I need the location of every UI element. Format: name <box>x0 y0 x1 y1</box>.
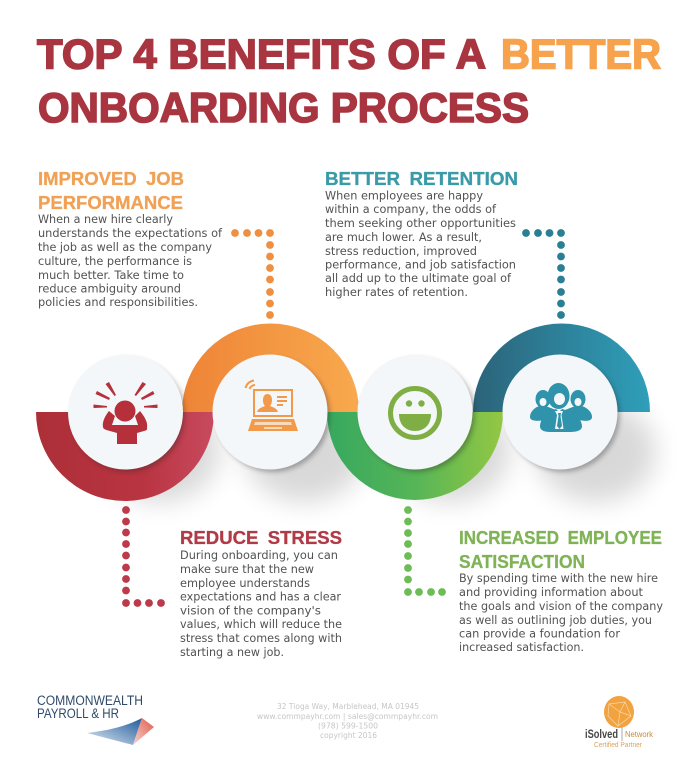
icon: business team <box>530 383 592 432</box>
logo: iSolved Network certified partner: iSolved <box>585 729 618 741</box>
dotted connector <box>231 229 274 319</box>
body text: the goals and vision of the company <box>459 599 663 613</box>
body text: By spending time with the new hire <box>459 571 658 585</box>
body text: stress that comes along with <box>180 631 342 645</box>
body text: values, which will reduce the <box>180 617 342 631</box>
segment: orange half ring <box>182 324 359 412</box>
body text: much better. Take time to <box>38 268 184 282</box>
body text <box>459 571 663 654</box>
logo: iSolved Network certified partner: Network <box>625 730 654 739</box>
dotted connector <box>522 229 565 319</box>
body text: culture, the performance is <box>38 254 192 268</box>
body text: make sure that the new <box>180 562 314 576</box>
footer contact text: (978) 599-1500 <box>318 722 378 730</box>
body text: and providing information about <box>459 585 643 599</box>
circle: team <box>502 354 618 470</box>
body text: higher rates of retention. <box>325 285 468 299</box>
body text: vision of the company's <box>180 604 321 618</box>
circle: smiley <box>358 354 472 470</box>
heading: IMPROVED JOB <box>38 169 184 189</box>
footer contact text: copyright 2016 <box>320 731 377 740</box>
panel: improved job performance <box>38 169 274 319</box>
process chain graphic <box>36 324 656 502</box>
segment: red half ring <box>36 412 214 501</box>
footer contact text <box>257 702 438 740</box>
icon: laptop with video call <box>246 380 298 431</box>
body text: reduce ambiguity around <box>38 282 181 296</box>
body text: are much lower. As a result, <box>325 230 482 244</box>
body text: can provide a foundation for <box>459 626 620 640</box>
circle: stress <box>68 354 183 470</box>
icon: smiley face <box>390 388 440 438</box>
heading: REDUCE STRESS <box>180 528 342 548</box>
body text: When employees are happy <box>325 188 483 202</box>
logo: Commonwealth Payroll & HR: COMMONWEALTH <box>37 693 143 708</box>
body text: them seeking other opportunities <box>325 216 516 230</box>
body text: expectations and has a clear <box>180 590 341 604</box>
title: TOP 4 BENEFITS OF A <box>37 30 486 78</box>
title: BETTER <box>501 30 661 78</box>
heading <box>38 169 184 213</box>
heading: SATISFACTION <box>459 552 585 572</box>
body text: all add up to the ultimate goal of <box>325 271 512 285</box>
panel: increased employee satisfaction <box>404 506 663 654</box>
heading: PERFORMANCE <box>38 193 183 213</box>
body text: performance, and job satisfaction <box>325 258 516 272</box>
footer contact text: 32 Tioga Way, Marblehead, MA 01945 <box>277 702 419 711</box>
icon: stressed person <box>94 382 158 444</box>
body text: starting a new job. <box>180 645 284 659</box>
body text: as well as outlining job duties, you <box>459 613 652 627</box>
heading <box>459 528 662 572</box>
title <box>37 30 661 131</box>
body text: employee understands <box>180 576 310 590</box>
body text: increased satisfaction. <box>459 640 584 654</box>
body text: policies and responsibilities. <box>38 295 198 309</box>
body text: When a new hire clearly <box>38 212 173 226</box>
body text <box>180 548 342 659</box>
circle: laptop <box>212 354 328 470</box>
body text: the job as well as the company <box>38 240 212 254</box>
title: ONBOARDING PROCESS <box>38 84 529 131</box>
dotted connector <box>122 506 165 607</box>
body text: During onboarding, you can <box>180 548 338 562</box>
body text: understands the expectations of <box>38 226 223 240</box>
dotted connector <box>404 506 446 596</box>
segment: green half ring <box>327 412 503 500</box>
panel: better retention <box>325 169 565 319</box>
panel: reduce stress <box>122 506 342 659</box>
body text: within a company, the odds of <box>325 202 497 216</box>
heading: BETTER RETENTION <box>325 169 518 189</box>
logo: Commonwealth Payroll & HR <box>37 693 154 745</box>
heading: INCREASED EMPLOYEE <box>459 528 662 548</box>
body text <box>38 212 223 309</box>
body text: stress reduction, improved <box>325 244 477 258</box>
logo: iSolved Network certified partner <box>585 696 654 749</box>
logo: iSolved Network certified partner: Certified Partner <box>594 742 643 749</box>
body text <box>325 188 516 299</box>
segment: teal half ring <box>473 324 650 412</box>
logo: Commonwealth Payroll & HR: PAYROLL & HR <box>37 706 119 721</box>
footer contact text: www.commpayhr.com | sales@commpayhr.com <box>257 712 438 721</box>
